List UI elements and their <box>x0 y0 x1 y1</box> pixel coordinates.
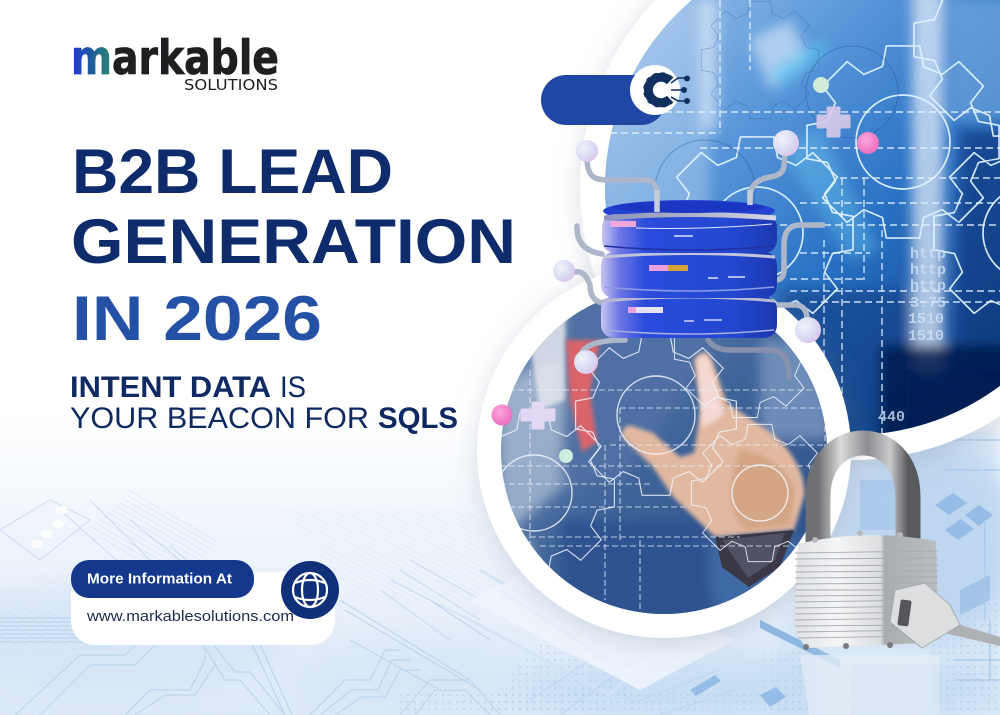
logo: SOLUTIONS <box>184 76 278 94</box>
contact block <box>71 560 339 645</box>
subtitle: YOUR BEACON FOR <box>70 402 369 435</box>
floating balls and plus marks <box>492 77 879 463</box>
pill: more information: More Information At <box>87 572 232 588</box>
connector tubes <box>575 155 823 378</box>
subtitle <box>70 371 458 435</box>
top pill with circuit gear icon <box>541 65 690 125</box>
shackle <box>818 443 908 545</box>
photo circle: server room with gears: http <box>910 246 946 263</box>
lock body <box>794 530 938 650</box>
subtitle: INTENT DATA <box>70 371 271 404</box>
title: IN 2026 <box>72 284 322 354</box>
padlock and key <box>794 443 1000 715</box>
title <box>71 137 516 354</box>
subtitle: SQLS <box>378 402 458 435</box>
disc 3 <box>601 296 777 338</box>
photo circle: server room with gears: http <box>910 278 946 295</box>
photo circle: server room with gears: 1510 <box>908 328 944 345</box>
disc 2 <box>601 252 777 298</box>
logo: markable <box>71 31 279 86</box>
photo circle: hand touching gears <box>454 264 851 638</box>
title: GENERATION <box>71 207 516 277</box>
icon: circuit gear <box>645 74 690 106</box>
website url: www.markablesolutions.com <box>86 609 294 625</box>
key <box>890 583 1000 648</box>
disc 1 <box>602 200 777 253</box>
icon: globe <box>281 561 339 619</box>
photo circle: server room with gears <box>580 0 1000 460</box>
photo circle: server room with gears: http <box>910 262 946 279</box>
photo circle: server room with gears: 1510 <box>908 311 944 328</box>
database server stack <box>575 155 823 378</box>
photo circle: server room with gears: 440 <box>878 409 905 426</box>
hand <box>622 352 805 587</box>
subtitle: IS <box>280 371 306 404</box>
pill: more information <box>71 560 254 598</box>
title: B2B LEAD <box>72 137 393 207</box>
photo circle: server room with gears: 3.75 <box>910 295 946 312</box>
